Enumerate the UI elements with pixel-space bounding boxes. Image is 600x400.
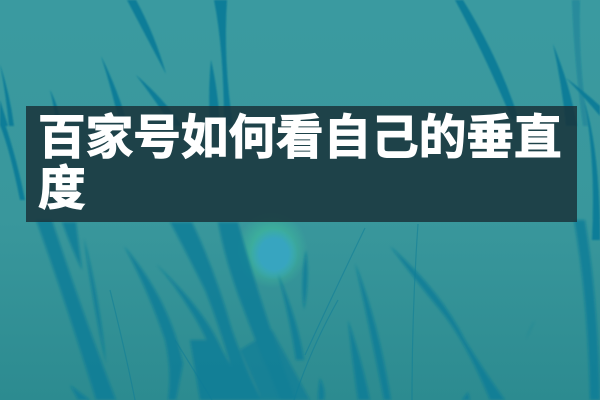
sun glow: [236, 212, 308, 288]
title banner: [26, 106, 577, 222]
grass blades: lower area: [36, 220, 600, 400]
thin stems: [110, 224, 418, 400]
title: 百家号如何看自己的垂直度: [38, 112, 562, 216]
grass blades: upper area: [0, 0, 600, 240]
